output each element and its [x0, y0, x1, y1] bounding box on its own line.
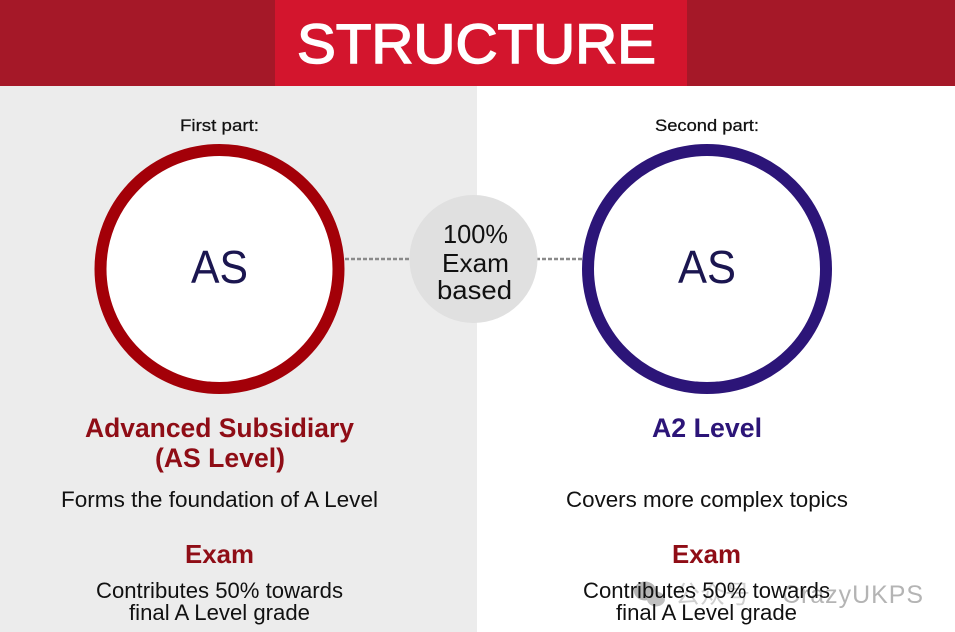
exam contribution text: [583, 578, 830, 625]
panel: second part: [566, 117, 848, 625]
label: first part: First part:: [180, 117, 259, 135]
watermark text: account name: CrazyUKPS: [782, 581, 924, 609]
heading: Advanced Subsidiary (AS Level): [85, 413, 354, 473]
label: second part: Second part:: [655, 117, 759, 135]
badge: 100% exam based: 100%: [443, 219, 508, 249]
exam contribution text: final A Level grade: [129, 600, 310, 625]
badge: 100% exam based: based: [437, 275, 512, 305]
icon: chat bubbles: [634, 582, 665, 606]
circle: A2: [588, 150, 826, 388]
heading: Advanced Subsidiary (AS Level): (AS Level): [155, 443, 285, 473]
subheading: exam: Exam: [672, 539, 741, 569]
connector: right dashed line: [536, 258, 583, 260]
description: Covers more complex topics: [566, 487, 848, 512]
panel: right white background: [477, 86, 955, 632]
exam contribution text: [96, 578, 343, 625]
exam contribution text: final A Level grade: [616, 600, 797, 625]
exam contribution text: Contributes 50% towards: [583, 578, 830, 603]
watermark text: account label: 公众号: [675, 581, 750, 609]
badge: 100% exam based: [410, 195, 538, 323]
circle: AS: AS: [191, 241, 248, 293]
heading: Advanced Subsidiary (AS Level): Advanced Subsidiary: [85, 413, 354, 443]
badge: 100% exam based: Exam: [442, 248, 509, 278]
title: STRUCTURE: [297, 12, 656, 75]
description: Forms the foundation of A Level: [61, 487, 378, 512]
circle: A2: AS: [678, 241, 736, 293]
panel: first part: [61, 117, 378, 625]
subheading: exam: Exam: [185, 539, 254, 569]
heading: A2 Level: A2 Level: [652, 413, 762, 443]
connector: left dashed line: [345, 258, 410, 260]
header band: [0, 0, 955, 86]
watermark: [634, 581, 924, 609]
panel: left grey background: [0, 86, 477, 632]
circle: AS: [100, 150, 338, 388]
exam contribution text: Contributes 50% towards: [96, 578, 343, 603]
